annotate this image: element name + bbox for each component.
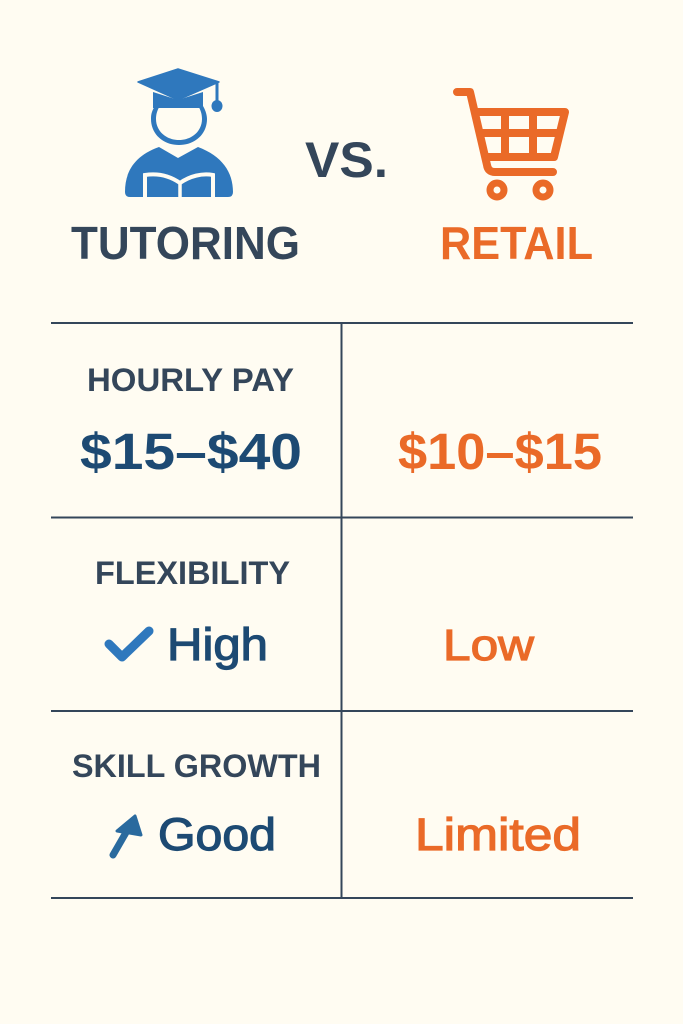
value: retail skill growth: Limited <box>415 809 581 860</box>
row: flexibility <box>95 555 534 670</box>
heading: tutoring: TUTORING <box>71 217 300 269</box>
label: hourly pay: HOURLY PAY <box>87 362 294 398</box>
icon: check mark <box>109 631 149 657</box>
heading: VS.: VS. <box>305 132 388 188</box>
value: tutoring pay: $15–$40 <box>80 423 302 480</box>
heading: retail: RETAIL <box>440 217 593 269</box>
row: skill growth <box>72 748 581 860</box>
value: tutoring skill growth: Good <box>158 809 276 860</box>
comparison table grid <box>51 323 633 898</box>
value: retail pay: $10–$15 <box>398 423 602 480</box>
value: retail flexibility: Low <box>443 621 534 670</box>
label: skill growth: SKILL GROWTH <box>72 748 321 784</box>
icon: up arrow <box>113 816 141 855</box>
icon: shopping cart <box>457 92 565 197</box>
value: tutoring flexibility: High <box>167 619 268 670</box>
icon: graduate with cap and book <box>125 69 233 197</box>
label: flexibility: FLEXIBILITY <box>95 555 290 591</box>
row: hourly pay <box>80 362 602 480</box>
